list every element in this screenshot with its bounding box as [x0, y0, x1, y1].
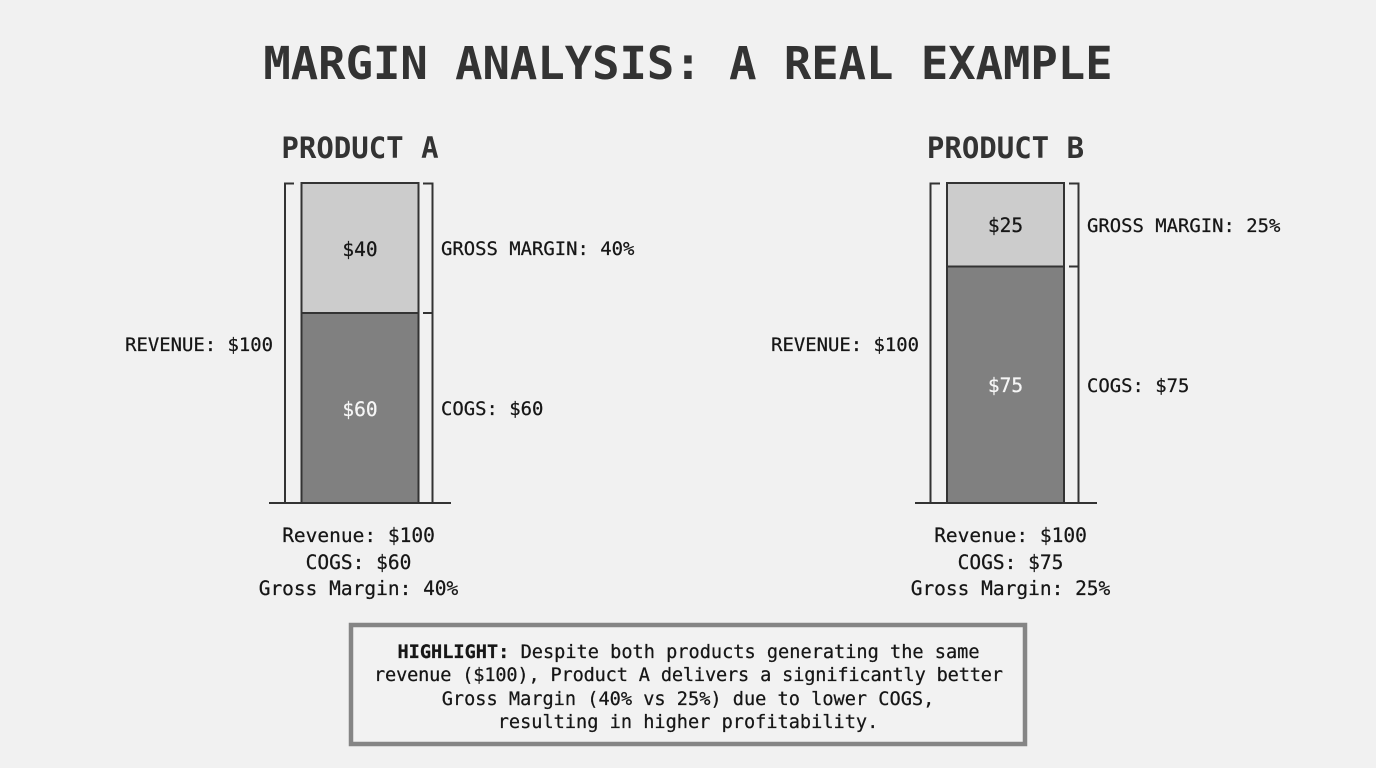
summary text: Gross Margin: 40% [259, 577, 459, 600]
bar segment: gross margin $25 [947, 183, 1064, 266]
right bracket: margin and COGS [1069, 184, 1078, 503]
label: gross margin: GROSS MARGIN: 25% [1087, 215, 1281, 237]
value: $40: $40 [342, 238, 378, 261]
label: revenue: REVENUE: $100 [771, 334, 919, 356]
value: $25: $25 [988, 214, 1023, 237]
callout text [374, 642, 1003, 733]
callout: highlight [351, 625, 1025, 744]
callout text: revenue ($100), Product A delivers a significantly better [374, 665, 1003, 686]
label: revenue: REVENUE: $100 [125, 334, 273, 356]
panel: product B [771, 131, 1281, 600]
label: gross margin: GROSS MARGIN: 40% [441, 238, 635, 260]
right bracket: margin and COGS [423, 184, 432, 503]
summary text [911, 524, 1111, 600]
heading: product A: PRODUCT A [281, 131, 439, 165]
summary text [259, 524, 459, 600]
callout text: HIGHLIGHT: Despite both products generating the same [397, 642, 980, 663]
value: $75: $75 [988, 374, 1023, 397]
baseline [915, 502, 1097, 504]
summary text: Gross Margin: 25% [911, 577, 1111, 600]
callout text: Gross Margin (40% vs 25%) due to lower COGS, [442, 689, 934, 710]
value: $60: $60 [342, 398, 378, 421]
panel: product A [125, 131, 635, 600]
title: MARGIN ANALYSIS: A REAL EXAMPLE [263, 37, 1113, 90]
summary text: Revenue: $100 [934, 524, 1087, 547]
left bracket: revenue [285, 184, 294, 503]
left bracket: revenue [930, 184, 940, 503]
callout box [351, 625, 1025, 744]
bar segment: COGS $60 [302, 313, 418, 503]
bar segment: COGS $75 [947, 266, 1064, 503]
summary text: COGS: $60 [306, 551, 411, 574]
baseline [269, 502, 451, 504]
label: COGS: COGS: $75 [1087, 375, 1189, 397]
label: COGS: COGS: $60 [441, 398, 543, 420]
bar segment: gross margin $40 [302, 183, 418, 313]
summary text: Revenue: $100 [282, 524, 435, 547]
summary text: COGS: $75 [958, 551, 1063, 574]
heading: product B: PRODUCT B [927, 131, 1084, 165]
callout text: resulting in higher profitability. [498, 712, 878, 733]
